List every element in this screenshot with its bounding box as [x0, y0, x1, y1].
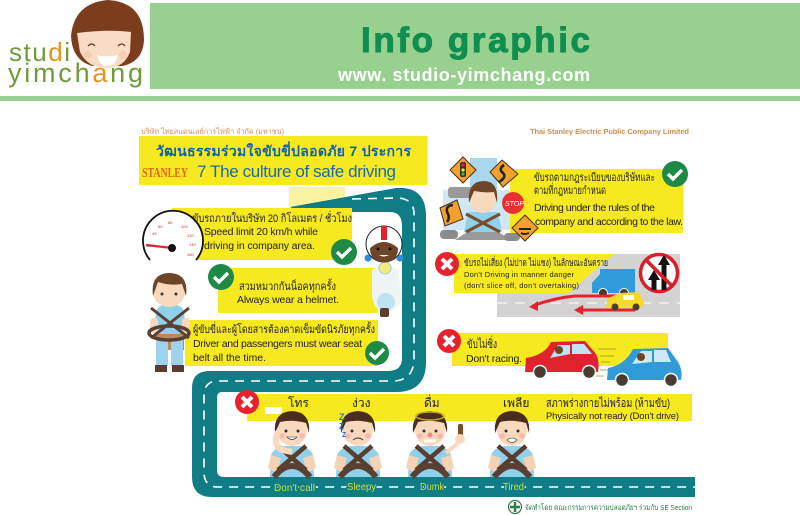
helmet thai: สวมหมวกกันน็อคทุกครั้ง: [239, 278, 336, 293]
logo face: [71, 0, 144, 68]
caption: tired: Tired: [503, 481, 524, 493]
driver: phone call: [265, 407, 316, 477]
not ready thai: สภาพร่างกายไม่พร้อม (ห้ามขับ): [546, 396, 670, 410]
logo wordmark: studi: [9, 37, 70, 67]
icon: cross not ready: [235, 390, 259, 414]
icon: check rules: [662, 161, 688, 187]
header logo: [8, 0, 144, 88]
icon: speedometer: 140: [189, 242, 196, 247]
footer text: จัดทำโดย คณะกรรมการความปลอดภัยฯ ร่วมกับ SE Section: [525, 503, 692, 512]
helmet panel: [218, 268, 378, 313]
illustration: blue car: [607, 348, 682, 386]
driver: tired: [488, 411, 536, 477]
caption: dumk: Dumk: [420, 481, 445, 493]
icon: check helmet: [208, 264, 234, 290]
icon: speedometer: 160: [187, 252, 194, 257]
illustration: driver with seat belt: [149, 273, 190, 372]
illustration: driver with road signs: [440, 157, 538, 241]
dangerous driving panel: (don't slice off, don't overtaking): [464, 281, 580, 290]
label sleepy thai: ง่วง: [352, 396, 370, 410]
illustration: scooter rider: [364, 226, 404, 317]
header logo: yimchang: [8, 58, 143, 88]
dangerous thai: ขับรถไม่เสี่ยง (ไม่ปาด ไม่แซง) ในลักษณะอันตราย: [464, 255, 608, 269]
icon: no overtaking sign: [640, 254, 678, 292]
label tired thai: เพลีย: [503, 396, 529, 410]
truck: [592, 269, 635, 298]
rules english: Driving under the rules of the: [534, 202, 655, 214]
speed limit english: Speed limit 20 km/h while: [204, 226, 318, 238]
helmet english: Always wear a helmet.: [237, 294, 339, 306]
caption: don't call: Don't call: [274, 482, 315, 494]
road: [192, 188, 695, 497]
dangerous english: Don't Driving in manner danger: [464, 270, 574, 279]
illustration: red car: [525, 341, 616, 378]
icon: cross dangerous: [435, 252, 459, 276]
seat belt panel: belt all the time.: [193, 352, 266, 364]
not ready english: Physically not ready (Don't drive): [546, 411, 679, 422]
sign: traffic light: [450, 157, 476, 183]
website url: www. studio-yimchang.com: [337, 65, 590, 85]
seat belt panel: [185, 320, 378, 366]
rules panel: [510, 169, 683, 233]
thai title: วัฒนธรรมร่วมใจขับขี่ปลอดภัย 7 ประการ: [156, 141, 411, 159]
stanley logo: STANLEY: [142, 166, 188, 181]
icon: speedometer: 20: [147, 243, 152, 248]
dangerous driving scene: [497, 254, 680, 317]
icon: safety cross: [508, 500, 522, 514]
driver: drunk: [406, 411, 465, 477]
speed limit panel: [172, 208, 352, 260]
racing thai: ขับไม่ซิ่ง: [467, 335, 497, 351]
seat belt thai: ผู้ขับขี่และผู้โดยสารต้องคาดเข็มขัดนิรภัยทุกครั้ง: [193, 321, 375, 336]
title panel: [139, 136, 427, 185]
speed limit panel: driving in company area.: [204, 240, 315, 252]
racing panel: [452, 333, 668, 366]
yellow car: [606, 292, 644, 310]
driver: sleepy: Z: [342, 432, 347, 439]
icon: cross racing: [437, 329, 461, 353]
rules panel: ตามที่กฎหมายกำหนด: [534, 182, 606, 197]
icon: speedometer: [143, 211, 203, 260]
sign: stop: STOP: [505, 201, 524, 208]
label call thai: โทร: [288, 396, 309, 410]
dangerous driving panel: [454, 254, 614, 293]
seat belt english: Driver and passengers must wear seat: [193, 338, 362, 350]
icon: speedometer: 40: [152, 231, 157, 236]
header title: Info graphic: [361, 21, 590, 60]
english title: 7 The culture of safe driving: [197, 162, 396, 181]
header rule: [0, 96, 800, 101]
driver: sleepy: Z: [339, 412, 345, 422]
not ready panel: [247, 394, 692, 422]
caption: sleepy: Sleepy: [347, 481, 377, 493]
company name thai: บริษัท ไทยสแตนเลย์การไฟฟ้า จำกัด (มหาชน): [141, 127, 284, 136]
icon: check seat belt: [365, 341, 389, 365]
label drunk thai: ดื่ม: [424, 394, 440, 410]
rules panel: company and according to the law.: [535, 216, 683, 228]
company name english: Thai Stanley Electric Public Company Limited: [530, 127, 689, 136]
icon: speedometer: 80: [168, 220, 173, 225]
icon: speedometer: 120: [187, 233, 194, 238]
icon: speedometer: 100: [181, 224, 188, 229]
pale road shadow: [289, 187, 345, 208]
driver: sleepy: Z: [339, 422, 344, 431]
racing english: Don't racing.: [466, 353, 522, 365]
sign: slippery: [512, 215, 538, 241]
icon: check speed: [331, 239, 357, 265]
rules thai: ขับรถตามกฎระเบียบของบริษัทและ: [534, 171, 655, 184]
speed limit thai: ขับรถภายในบริษัท 20 กิโลเมตร / ชั่วโมง: [192, 210, 352, 225]
sign: winding road: [490, 160, 518, 187]
footer credit: [508, 500, 692, 514]
driver: sleepy: [334, 411, 382, 477]
header banner: [150, 3, 800, 89]
sign: curve: [440, 200, 463, 226]
red arrows: [529, 296, 635, 315]
icon: speedometer: 60: [158, 224, 163, 229]
